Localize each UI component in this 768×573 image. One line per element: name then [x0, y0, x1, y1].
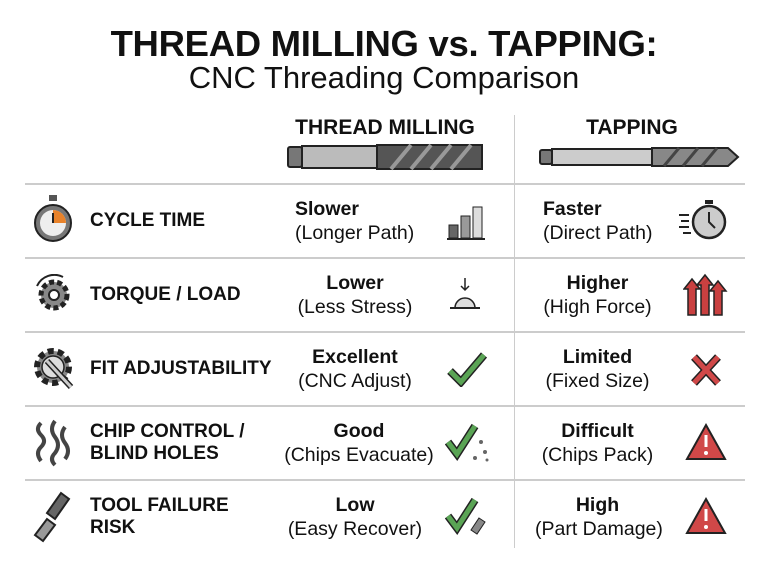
- row: tool failure: [34, 492, 727, 542]
- icon: thread mill tool: [287, 144, 483, 170]
- value: milling: [284, 420, 434, 466]
- label: FIT ADJUSTABILITY: [90, 358, 272, 379]
- label: [90, 421, 244, 464]
- icon: warning: [685, 497, 727, 534]
- value: milling: Slower: [295, 198, 359, 220]
- value: tapping: (Direct Path): [543, 222, 652, 244]
- value: tapping: [542, 420, 653, 466]
- icon: fast stopwatch: [679, 200, 726, 240]
- column header: thread milling: THREAD MILLING: [295, 116, 475, 139]
- icon: low load: [450, 278, 480, 309]
- value: milling: (Chips Evacuate): [284, 444, 434, 466]
- value: tapping: Limited: [563, 346, 632, 368]
- icon: gear rotate: [36, 274, 70, 310]
- label: BLIND HOLES: [90, 443, 219, 464]
- value: tapping: High: [576, 494, 619, 516]
- value: milling: [298, 272, 412, 318]
- value: tapping: [535, 494, 663, 540]
- value: milling: (Longer Path): [295, 222, 414, 244]
- value: tapping: (Chips Pack): [542, 444, 653, 466]
- value: milling: (Easy Recover): [288, 518, 422, 540]
- value: milling: [298, 346, 412, 392]
- row: cycle time: [34, 195, 726, 244]
- icon: cross: [691, 354, 721, 386]
- label: [90, 495, 229, 538]
- label: TORQUE / LOAD: [90, 284, 241, 305]
- value: tapping: (Fixed Size): [545, 370, 650, 392]
- label: CHIP CONTROL /: [90, 421, 244, 442]
- icon: check chips: [445, 424, 488, 462]
- label: RISK: [90, 517, 135, 538]
- value: tapping: [543, 272, 652, 318]
- value: milling: [288, 494, 422, 540]
- value: tapping: [543, 198, 652, 244]
- row: torque: [36, 272, 728, 318]
- value: tapping: [545, 346, 650, 392]
- icon: broken tool: [34, 492, 70, 542]
- value: tapping: Higher: [567, 272, 628, 294]
- value: milling: Lower: [326, 272, 384, 294]
- value: tapping: (Part Damage): [535, 518, 663, 540]
- value: tapping: Difficult: [561, 420, 634, 442]
- icon: warning: [685, 423, 727, 460]
- row: fit adjustability: [34, 346, 721, 392]
- icon: gear wrench: [34, 348, 74, 389]
- value: milling: Excellent: [312, 346, 398, 368]
- icon: stopwatch: [34, 195, 72, 242]
- icon: check: [447, 352, 487, 387]
- column header: tapping: TAPPING: [586, 116, 678, 139]
- icon: bar chart: [447, 206, 485, 240]
- row: chip control: [36, 420, 727, 466]
- icon: chips: [36, 420, 70, 466]
- icon: check tool: [445, 498, 486, 535]
- dividers: [25, 183, 745, 185]
- value: tapping: Faster: [543, 198, 602, 220]
- title: THREAD MILLING vs. TAPPING:: [111, 23, 657, 64]
- value: milling: (CNC Adjust): [298, 370, 412, 392]
- label: TOOL FAILURE: [90, 495, 229, 516]
- icon: up arrows: [683, 274, 728, 316]
- value: milling: [295, 198, 414, 244]
- value: milling: Low: [336, 494, 374, 516]
- value: tapping: (High Force): [543, 296, 652, 318]
- label: CYCLE TIME: [90, 210, 205, 231]
- value: milling: Good: [334, 420, 384, 442]
- value: milling: (Less Stress): [298, 296, 412, 318]
- icon: tap tool: [539, 147, 740, 167]
- subtitle: CNC Threading Comparison: [189, 60, 579, 95]
